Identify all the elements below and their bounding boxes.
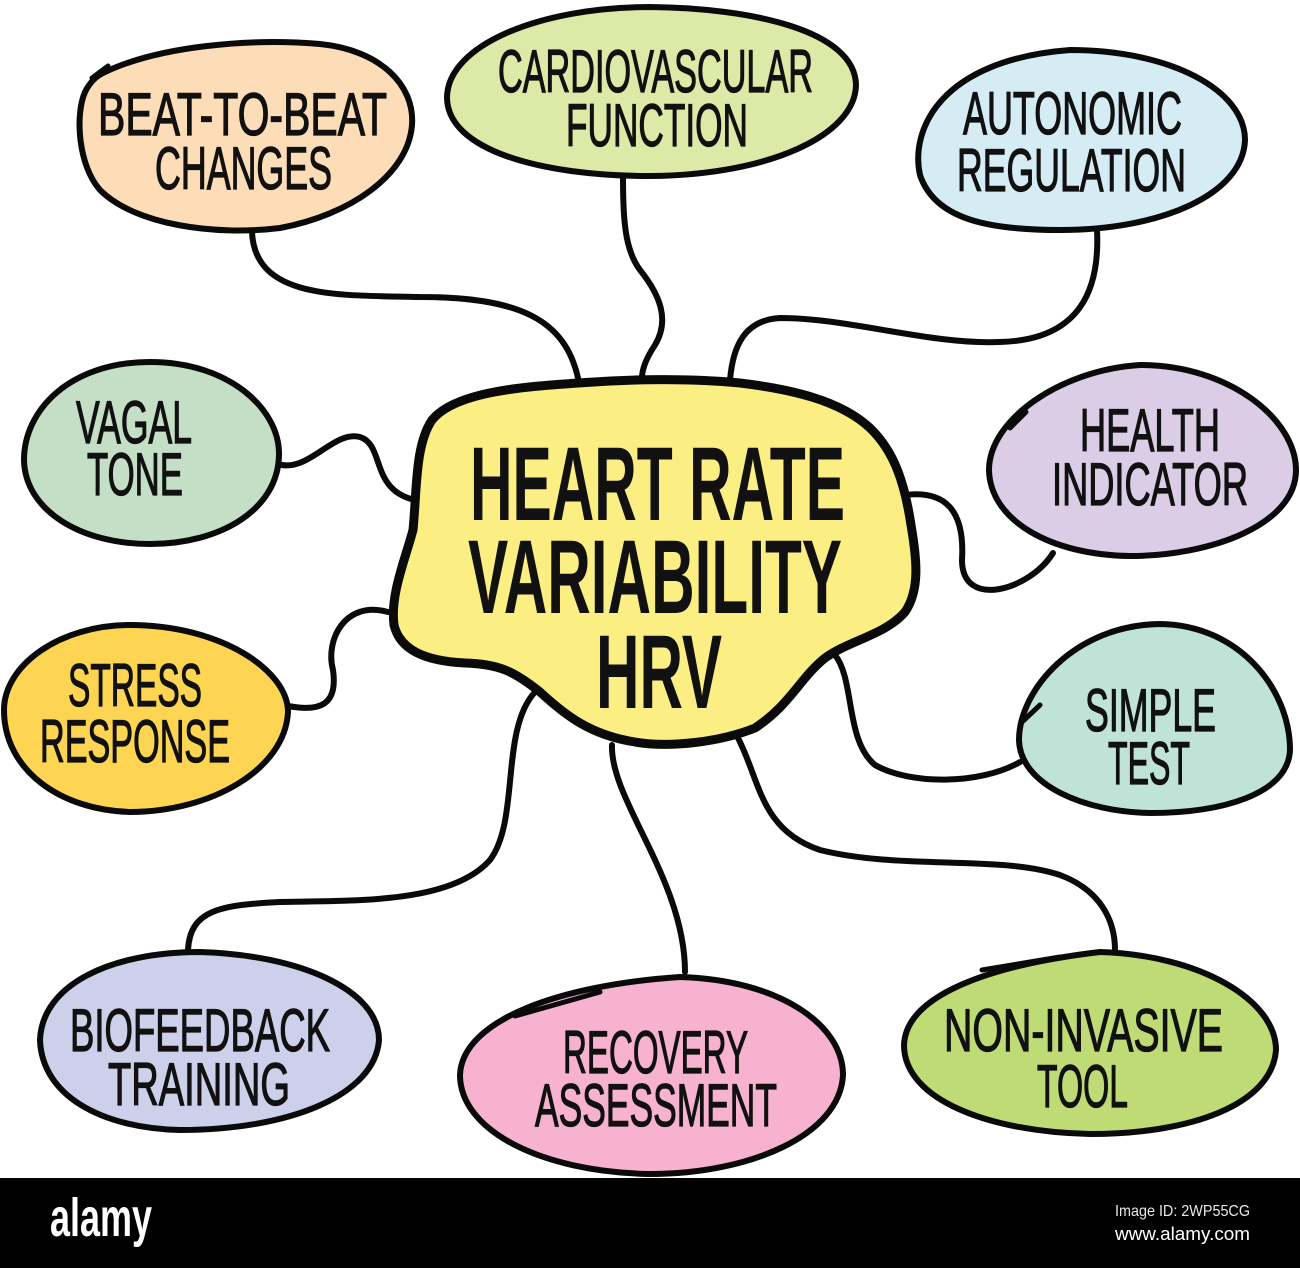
- label: BIOFEEDBACK: [70, 997, 330, 1064]
- connector lines: [188, 178, 1115, 972]
- central blob: [393, 380, 916, 744]
- label: TRAINING: [108, 1051, 290, 1118]
- label: FUNCTION: [566, 92, 748, 159]
- connector: recovery assessment: [612, 745, 685, 972]
- node: simple test: [1019, 624, 1290, 813]
- label: [40, 652, 230, 775]
- label: RESPONSE: [40, 708, 230, 775]
- node: health indicator: [989, 365, 1296, 556]
- label: [1085, 677, 1216, 797]
- node: vagal tone: [24, 362, 279, 544]
- label: [535, 1019, 777, 1139]
- connector: vagal tone: [282, 436, 415, 500]
- node: stress response: [4, 625, 288, 812]
- label: VAGAL: [76, 389, 192, 456]
- connector: biofeedback training: [188, 692, 535, 950]
- label: [498, 38, 813, 159]
- blob: [40, 952, 379, 1130]
- label: [70, 997, 330, 1118]
- label: STRESS: [68, 652, 202, 719]
- connector: autonomic regulation: [730, 230, 1097, 380]
- blob: [1019, 624, 1290, 813]
- title text: HRV: [596, 614, 722, 731]
- label: [957, 80, 1186, 204]
- label: BEAT-TO-BEAT: [98, 81, 387, 148]
- label: [76, 389, 192, 508]
- outline tail: [1022, 705, 1040, 722]
- node: autonomic regulation: [918, 50, 1245, 230]
- outline tail: [982, 957, 1060, 970]
- label: SIMPLE: [1085, 677, 1216, 744]
- label: CHANGES: [155, 135, 332, 202]
- label: ASSESSMENT: [535, 1072, 777, 1139]
- node: beat-to-beat changes: [80, 42, 412, 230]
- blob: [24, 362, 279, 544]
- connector: health indicator: [905, 494, 1053, 590]
- image id: Image ID: 2WP55CG: [1115, 1203, 1250, 1220]
- blob: [447, 7, 856, 176]
- label: [98, 81, 387, 202]
- outline tail: [92, 66, 108, 78]
- footer logo: alamy: [50, 1188, 152, 1248]
- label: TONE: [87, 441, 183, 508]
- label: [944, 997, 1223, 1120]
- label: [1052, 397, 1248, 518]
- footer background: [0, 1178, 1300, 1268]
- title text: HEART RATE: [470, 426, 845, 543]
- blob: [4, 625, 288, 812]
- connector: cardiovascular function: [623, 178, 662, 378]
- node: non-invasive tool: [904, 952, 1276, 1134]
- connector: non-invasive tool: [738, 738, 1115, 950]
- connector: beat-to-beat changes: [252, 232, 578, 378]
- label: TOOL: [1037, 1053, 1128, 1120]
- blob: [918, 50, 1245, 230]
- node: recovery assessment: [460, 977, 843, 1174]
- central topic: heart rate variability: [393, 380, 916, 744]
- outline tail: [1010, 412, 1026, 428]
- website: www.alamy.com: [1114, 1224, 1250, 1244]
- connector: stress response: [288, 610, 388, 708]
- node: biofeedback training: [40, 952, 379, 1130]
- label: CARDIOVASCULAR: [498, 38, 813, 105]
- label: TEST: [1108, 730, 1190, 797]
- connector: simple test: [835, 655, 1020, 780]
- node: cardiovascular function: [447, 7, 856, 176]
- blob: [989, 365, 1296, 556]
- title text: [468, 426, 845, 731]
- outline tail: [515, 992, 600, 1016]
- title text: VARIABILITY: [468, 519, 842, 636]
- blob: [904, 952, 1276, 1134]
- blob: [80, 42, 412, 230]
- label: RECOVERY: [563, 1019, 748, 1086]
- blob: [460, 977, 843, 1174]
- stock footer bar: [0, 1178, 1300, 1268]
